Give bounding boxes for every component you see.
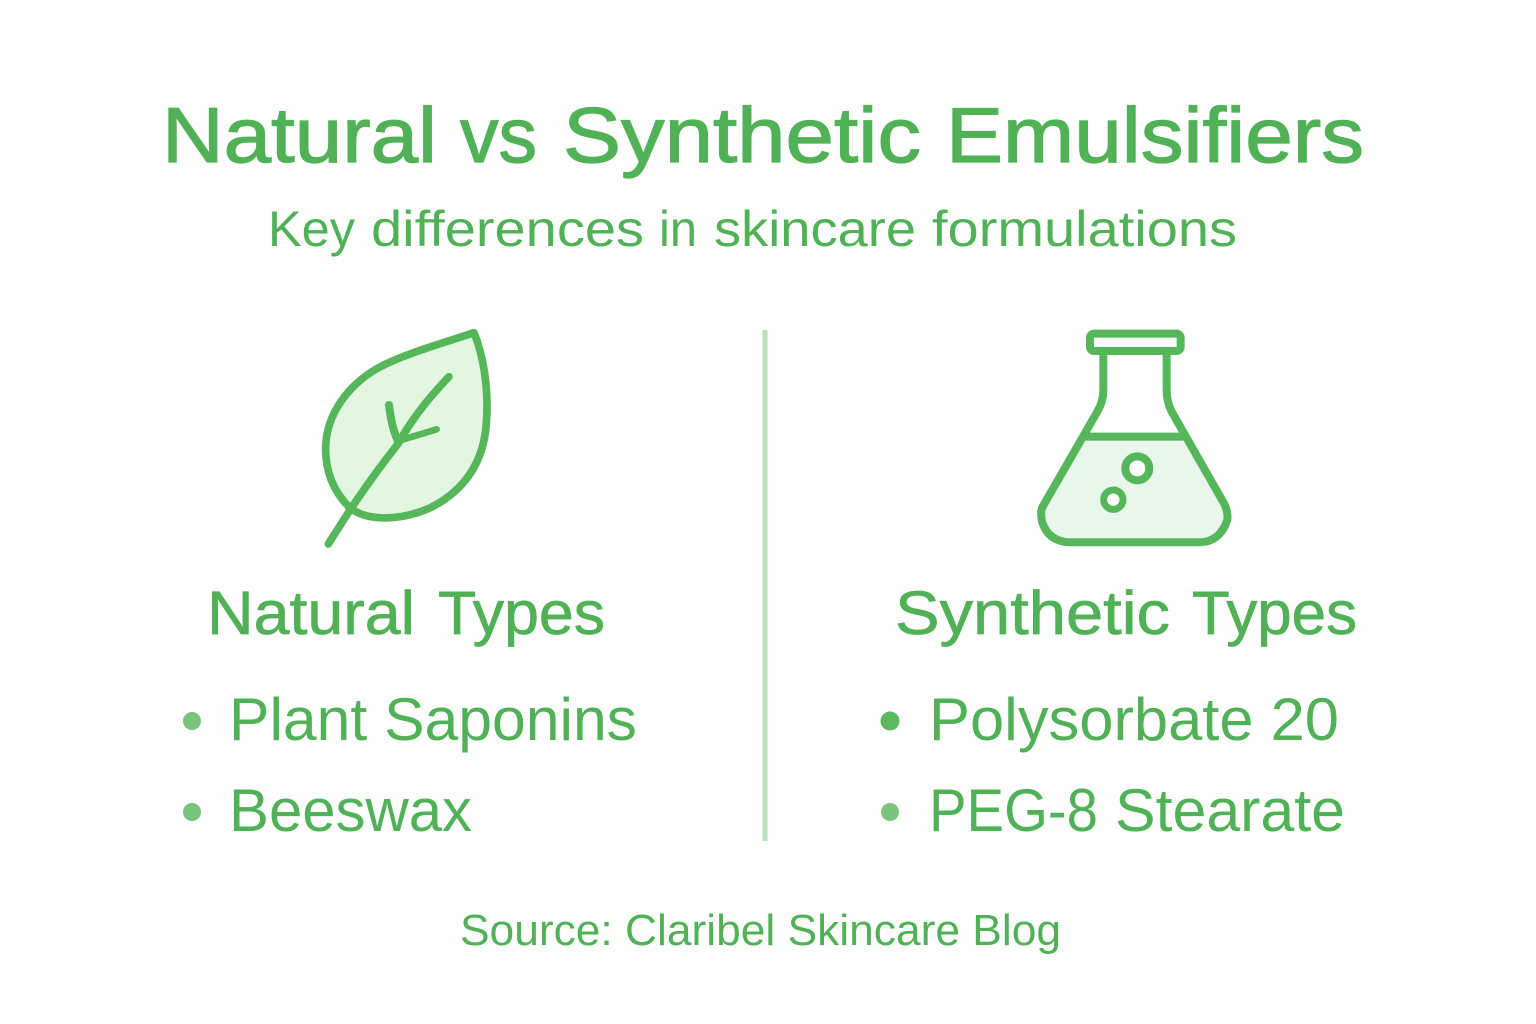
icon: leaf: [324, 331, 490, 544]
title: Synthetic: [563, 91, 921, 179]
title: Natural: [162, 91, 437, 179]
subtitle: differences: [371, 201, 644, 257]
bullet: beeswax: Beeswax: [229, 777, 472, 844]
subtitle: formulations: [932, 201, 1237, 257]
subtitle: [268, 201, 1237, 257]
heading: synthetic types: Types: [1192, 579, 1357, 647]
heading: natural types: Natural: [207, 579, 415, 647]
bullet: peg-8 stearate: [881, 777, 1345, 844]
bullet: polysorbate 20: Polysorbate 20: [929, 686, 1339, 753]
center divider: [762, 330, 768, 841]
bullet: peg-8 stearate: PEG-8: [929, 777, 1098, 844]
source note: Source: Claribel Skincare Blog: [460, 906, 1061, 955]
icon: flask: [1041, 334, 1228, 542]
bullet: peg-8 stearate: Stearate: [1115, 777, 1345, 844]
title: vs: [460, 91, 537, 179]
title: Emulsifiers: [946, 91, 1364, 179]
bullet: plant saponins: Plant Saponins: [229, 686, 637, 753]
subtitle: in: [659, 201, 697, 257]
heading: synthetic types: Synthetic: [895, 579, 1170, 647]
heading: synthetic types: [895, 579, 1357, 647]
heading: natural types: [207, 579, 605, 647]
subtitle: Key: [268, 201, 355, 257]
subtitle: skincare: [714, 201, 916, 257]
panel: synthetic emulsifiers: [880, 334, 1357, 844]
title: [162, 91, 1364, 179]
heading: natural types: Types: [438, 579, 605, 647]
panel: natural emulsifiers: [183, 331, 637, 844]
